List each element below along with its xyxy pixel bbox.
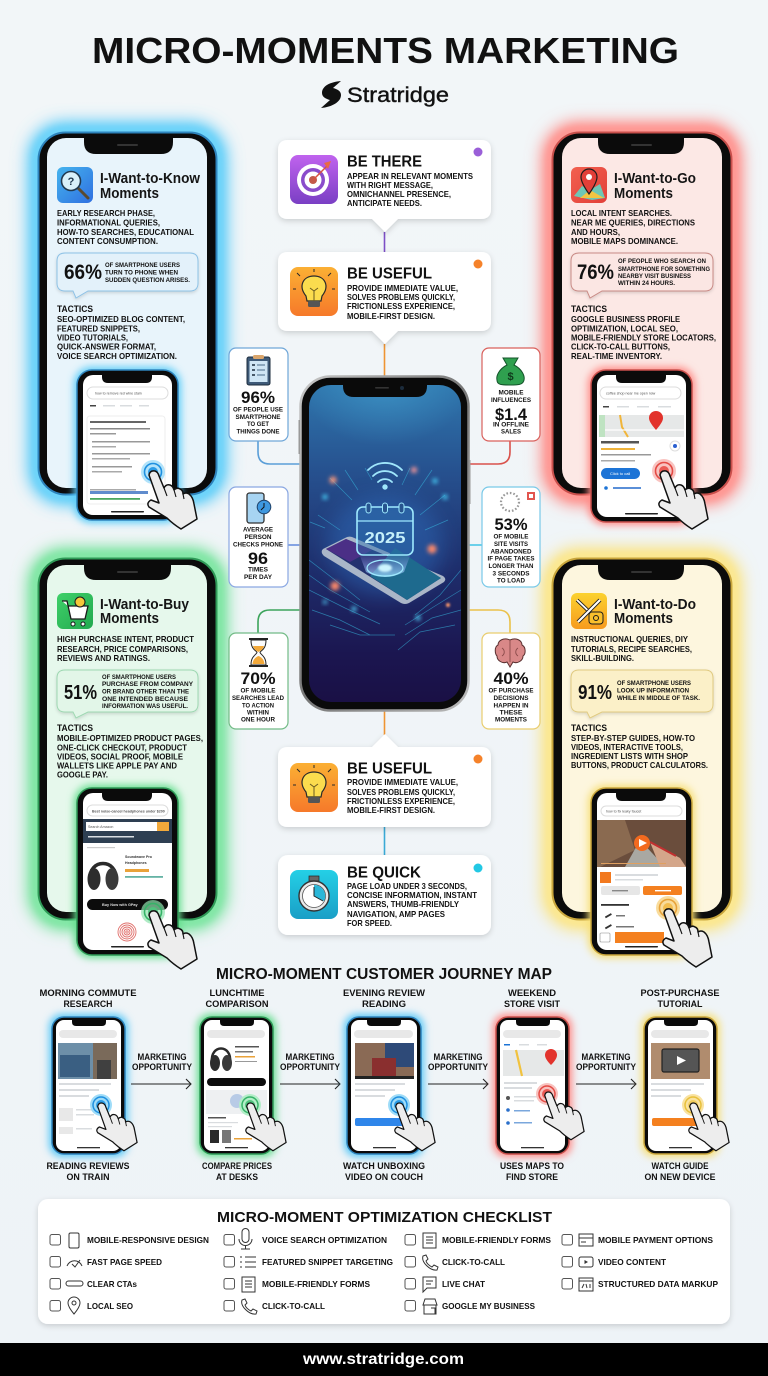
tactics: ONE-CLICK CHECKOUT, PRODUCT xyxy=(57,742,188,752)
callout: 66% stat xyxy=(57,253,198,298)
arrow: marketing opportunity 1 xyxy=(131,1052,192,1089)
checklist column 2: VOICE SEARCH OPTIMIZATION xyxy=(262,1236,387,1245)
stat box: 96% get things done: 96% xyxy=(241,388,275,407)
callout: 66% stat: TURN TO PHONE WHEN xyxy=(105,270,178,276)
journey heading: MICRO-MOMENT CUSTOMER JOURNEY MAP xyxy=(216,966,552,983)
tactics: GOOGLE BUSINESS PROFILE xyxy=(571,314,680,324)
description xyxy=(57,634,195,663)
label above: READING xyxy=(362,999,406,1009)
illustration: hologram beam xyxy=(360,556,410,577)
card: be there: ANTICIPATE NEEDS. xyxy=(347,198,422,208)
panel: I-Want-to-Do phone xyxy=(552,558,732,920)
glow: four big phones xyxy=(28,122,742,930)
tactics: FEATURED SNIPPETS, xyxy=(57,324,140,334)
tactics: VOICE SEARCH OPTIMIZATION. xyxy=(57,351,177,361)
checklist column 1: CLEAR CTAs xyxy=(87,1280,137,1289)
arrow: marketing opportunity 4: MARKETING xyxy=(582,1052,630,1062)
callout: 91% stat: OF SMARTPHONE USERS xyxy=(617,680,692,687)
checklist column 4: STRUCTURED DATA MARKUP xyxy=(598,1280,719,1289)
tactics: STEP-BY-STEP GUIDES, HOW-TO xyxy=(571,733,695,743)
label below xyxy=(202,1161,272,1182)
card: be there: BE THERE xyxy=(347,154,422,170)
heading xyxy=(100,171,201,202)
stat box: 96 times per day xyxy=(229,487,288,587)
tactics xyxy=(57,304,185,361)
icon: tapping hand xyxy=(689,1103,729,1151)
checklist column 3: LIVE CHAT xyxy=(442,1280,485,1289)
label above xyxy=(504,988,560,1009)
label above: MORNING COMMUTE xyxy=(40,988,136,998)
description xyxy=(57,208,194,246)
buttons: shop tools and buy now xyxy=(601,886,682,895)
label below: FIND STORE xyxy=(506,1172,558,1182)
arrow: marketing opportunity 4 xyxy=(576,1052,636,1089)
label above: STORE VISIT xyxy=(504,999,560,1009)
card: be quick: BE QUICK xyxy=(347,864,422,882)
callout: 76% stat: OF PEOPLE WHO SEARCH ON xyxy=(618,258,706,265)
arrow: marketing opportunity 4: OPPORTUNITY xyxy=(576,1062,636,1072)
stat box: 53% abandoned: ABANDONED xyxy=(490,548,532,556)
tactics xyxy=(571,304,716,361)
button xyxy=(355,1118,406,1126)
video thumbnail xyxy=(597,820,686,867)
tactics: TACTICS xyxy=(57,723,93,734)
label below: READING REVIEWS xyxy=(46,1161,130,1171)
card: be useful top: MOBILE-FIRST DESIGN. xyxy=(347,311,435,321)
label below: VIDEO ON COUCH xyxy=(345,1172,423,1182)
checklist column 1: LOCAL SEO xyxy=(87,1302,134,1311)
arrow: marketing opportunity 1: OPPORTUNITY xyxy=(132,1062,192,1072)
stat box: 96 times per day: CHECKS PHONE xyxy=(233,542,284,548)
checklist column 2 xyxy=(224,1229,393,1314)
panel: small phone search results xyxy=(74,367,197,529)
checklist heading: MICRO-MOMENT OPTIMIZATION CHECKLIST xyxy=(217,1209,552,1226)
panel: small phone product page: Search Amazon xyxy=(88,825,113,829)
callout: 51% stat: OF SMARTPHONE USERS xyxy=(102,674,177,681)
callout: 91% stat: 91% xyxy=(578,682,612,704)
stat box: 96% get things done: SMARTPHONE xyxy=(236,414,281,421)
label above: COMPARISON xyxy=(206,999,268,1009)
button: buy now xyxy=(87,899,168,910)
description: CONTENT CONSUMPTION. xyxy=(57,236,158,246)
icon: tapping hand xyxy=(148,911,197,969)
tactics xyxy=(57,723,203,780)
tactics: WALLETS LIKE APPLE PAY AND xyxy=(57,760,177,770)
card: be useful top: SOLVES PROBLEMS QUICKLY, xyxy=(347,292,455,302)
card: be there: OMNICHANNEL PRESENCE, xyxy=(347,189,451,199)
icon: money bag: $ xyxy=(507,371,514,383)
journey step 2: lunchtime comparison xyxy=(197,988,286,1182)
panel: small phone product page xyxy=(74,785,197,969)
card: be useful top: PROVIDE IMMEDIATE VALUE, xyxy=(347,283,458,293)
label below xyxy=(46,1161,130,1182)
label above: EVENING REVIEW xyxy=(343,988,426,998)
heading: I-Want-to-Buy xyxy=(100,597,189,613)
button: buy now: Buy Now with GPay xyxy=(102,903,139,907)
card: be quick: CONCISE INFORMATION, INSTANT xyxy=(347,890,478,900)
callout: 91% stat: WHILE IN MIDDLE OF TASK. xyxy=(617,695,700,702)
stat box: 96% get things done xyxy=(229,348,288,441)
description: HIGH PURCHASE INTENT, PRODUCT xyxy=(57,634,195,644)
card: be quick: FOR SPEED. xyxy=(347,918,392,928)
button xyxy=(652,1118,698,1126)
icon: brain xyxy=(495,639,525,667)
description xyxy=(571,208,695,246)
icon: tapping hand xyxy=(395,1103,435,1151)
stat box: 70% act within one hour: SEARCHES LEAD xyxy=(232,695,284,702)
icon: hourglass xyxy=(249,639,268,666)
stat box: 96 times per day: PER DAY xyxy=(244,574,273,581)
description: SKILL-BUILDING. xyxy=(571,653,634,663)
checklist column 1 xyxy=(50,1233,209,1314)
icon: fingerprint xyxy=(118,923,136,941)
illustration: haze behind artwork xyxy=(327,495,443,595)
tactics: OPTIMIZATION, LOCAL SEO, xyxy=(571,324,678,334)
checklist column 3: MOBILE-FRIENDLY FORMS xyxy=(442,1236,552,1245)
card: be there: APPEAR IN RELEVANT MOMENTS xyxy=(347,171,473,181)
connector lines xyxy=(258,232,510,855)
icon: light bulb xyxy=(290,763,338,812)
callout: 51% stat: OR BRAND OTHER THAN THE xyxy=(102,688,190,696)
callout: 51% stat: ONE INTENDED BECAUSE xyxy=(102,696,189,703)
label above xyxy=(206,988,268,1009)
heading xyxy=(614,597,696,627)
tactics: QUICK-ANSWER FORMAT, xyxy=(57,342,156,352)
card: be quick: PAGE LOAD UNDER 3 SECONDS, xyxy=(347,881,467,891)
logo: Stratridge xyxy=(321,81,449,108)
panel: optimization checklist xyxy=(38,1199,730,1324)
stat box: 40% decisions: THESE xyxy=(500,710,523,716)
heading xyxy=(100,597,189,627)
card: be useful bottom: SOLVES PROBLEMS QUICKLY, xyxy=(347,787,455,797)
stat box: 53% abandoned: TO LOAD xyxy=(497,578,525,584)
callout: 76% stat: NEARBY VISIT BUSINESS xyxy=(618,273,692,280)
checklist column 2: FEATURED SNIPPET TARGETING xyxy=(262,1258,393,1267)
description: NEAR ME QUERIES, DIRECTIONS xyxy=(571,218,695,228)
stat box: 40% decisions: OF PURCHASE xyxy=(488,688,534,694)
label below: USES MAPS TO xyxy=(500,1161,564,1171)
stat box: 40% decisions: HAPPEN IN xyxy=(494,702,529,710)
icon: map pin xyxy=(571,167,607,203)
callout: 76% stat: SMARTPHONE FOR SOMETHING xyxy=(618,266,710,273)
journey step 1: morning commute xyxy=(40,988,137,1182)
illustration: circuit lines xyxy=(309,468,461,650)
icon: phone with clock xyxy=(247,493,271,523)
description: TUTORIALS, RECIPE SEARCHES, xyxy=(571,644,692,654)
callout: 91% stat xyxy=(571,670,713,718)
icon: tapping hand xyxy=(97,1103,137,1151)
tactics: MOBILE-FRIENDLY STORE LOCATORS, xyxy=(571,332,716,342)
stat box: $1.4 mobile influences: $1.4 xyxy=(495,405,528,424)
callout: 76% stat: WITHIN 24 HOURS. xyxy=(618,280,675,287)
label below xyxy=(500,1161,564,1182)
arrow: marketing opportunity 3: OPPORTUNITY xyxy=(428,1062,488,1072)
journey step 5: post-purchase tutorial xyxy=(640,988,729,1182)
panel: I-Want-to-Buy phone xyxy=(38,558,216,920)
arrow: marketing opportunity 2: MARKETING xyxy=(286,1052,334,1062)
checklist column 2: MOBILE-FRIENDLY FORMS xyxy=(262,1280,371,1289)
label below: ON NEW DEVICE xyxy=(644,1172,716,1182)
stat box: 53% abandoned: 53% xyxy=(494,515,528,534)
card: be quick xyxy=(278,855,491,935)
checklist column 3: CLICK-TO-CALL xyxy=(442,1258,505,1267)
panel: small phone map results xyxy=(588,367,708,529)
checklist column 4: VIDEO CONTENT xyxy=(598,1258,666,1267)
tactics: TACTICS xyxy=(57,304,93,315)
button: click to call: Click to call xyxy=(610,471,630,476)
card: be useful bottom: BE USEFUL xyxy=(347,760,432,778)
stat box: 96 times per day: PERSON xyxy=(244,534,272,541)
tactics: VIDEOS, INTERACTIVE TOOLS, xyxy=(571,742,683,752)
journey step 3: evening review reading xyxy=(343,988,435,1182)
stat box: 96 times per day: 96 xyxy=(248,549,268,568)
stat box: 40% decisions: 40% xyxy=(494,669,528,688)
stat box: 40% decisions xyxy=(482,633,540,729)
arrow: marketing opportunity 2 xyxy=(280,1052,340,1089)
card: be useful bottom: MOBILE-FIRST DESIGN. xyxy=(347,805,435,815)
label above: TUTORIAL xyxy=(658,999,703,1009)
stat box: 96 times per day: TIMES xyxy=(248,566,269,574)
icon: tapping hand xyxy=(246,1103,286,1151)
card: be there: WITH RIGHT MESSAGE, xyxy=(347,180,433,190)
callout: 51% stat: INFORMATION WAS USEFUL. xyxy=(102,703,188,710)
label below xyxy=(644,1161,716,1182)
illustration: tilted smartphone xyxy=(322,537,445,604)
arrow: marketing opportunity 1: MARKETING xyxy=(138,1052,186,1062)
icon: tapping hand xyxy=(544,1092,584,1140)
label above: POST-PURCHASE xyxy=(640,988,720,998)
icon: 2025 calendar xyxy=(357,503,413,555)
label above: WEEKEND xyxy=(508,988,557,998)
label below: COMPARE PRICES xyxy=(202,1161,272,1171)
arrow: marketing opportunity 3: MARKETING xyxy=(434,1052,482,1062)
description: INFORMATIONAL QUERIES, xyxy=(57,218,160,228)
callout: 76% stat: 76% xyxy=(577,261,614,284)
panel: small phone product page: Soundwave Pro xyxy=(125,855,153,859)
icon: headphones xyxy=(88,864,118,890)
callout: 51% stat: 51% xyxy=(64,682,97,704)
heading: I-Want-to-Do xyxy=(614,597,696,613)
checklist column 2: CLICK-TO-CALL xyxy=(262,1302,325,1311)
heading xyxy=(614,171,696,202)
logo: Stratridge: Stratridge xyxy=(347,84,449,107)
icon: 2025 calendar: 2025 xyxy=(364,530,406,547)
stat box: 40% decisions: MOMENTS xyxy=(495,716,528,724)
heading: Moments xyxy=(614,186,673,202)
tactics: TACTICS xyxy=(571,723,607,734)
checklist column 3 xyxy=(405,1233,552,1314)
stat box: 70% act within one hour: OF MOBILE xyxy=(240,688,276,694)
stat box: 96% get things done: THINGS DONE xyxy=(236,428,280,436)
icon: light bulb xyxy=(290,267,338,316)
checklist column 1: MOBILE-RESPONSIVE DESIGN xyxy=(87,1236,209,1245)
footer bar xyxy=(0,1343,768,1376)
icon: target xyxy=(290,155,338,204)
description: LOCAL INTENT SEARCHES. xyxy=(571,208,672,218)
stat box: 53% abandoned: LONGER THAN xyxy=(488,563,534,570)
stat box: 70% act within one hour xyxy=(229,633,288,729)
footer bar: www.stratridge.com xyxy=(302,1351,464,1368)
tactics: INGREDIENT LISTS WITH SHOP xyxy=(571,751,688,761)
stat box: 53% abandoned: SITE VISITS xyxy=(494,541,529,548)
callout: 66% stat: SUDDEN QUESTION ARISES. xyxy=(105,277,190,284)
icon: tools xyxy=(571,593,607,629)
map xyxy=(599,411,684,437)
stat box: 53% abandoned xyxy=(482,487,540,587)
icon: tapping hand xyxy=(659,471,708,529)
callout: 51% stat: PURCHASE FROM COMPANY xyxy=(102,681,194,688)
stat box: 53% abandoned: IF PAGE TAKES xyxy=(488,556,535,562)
callout: 76% stat xyxy=(571,253,713,298)
arrow: marketing opportunity 3 xyxy=(428,1052,488,1089)
description: AND HOURS, xyxy=(571,227,620,237)
icon: loading spinner xyxy=(501,492,535,511)
stat box: 53% abandoned: 3 SECONDS xyxy=(492,570,530,578)
description: MOBILE MAPS DOMINANCE. xyxy=(571,236,678,246)
description xyxy=(571,634,692,663)
stat box: $1.4 mobile influences: INFLUENCES xyxy=(491,397,532,404)
label above xyxy=(40,988,136,1009)
panel: small phone map results: coffee shop near me open now xyxy=(606,392,656,396)
icon: wifi xyxy=(368,463,402,489)
description: REVIEWS AND RATINGS. xyxy=(57,653,150,663)
icon: clipboard xyxy=(247,355,270,385)
label below: AT DESKS xyxy=(216,1172,258,1182)
tactics: CLICK-TO-CALL BUTTONS, xyxy=(571,342,670,352)
journey step 4: weekend store visit xyxy=(493,988,584,1182)
icon: shopping cart xyxy=(57,593,93,629)
description: HOW-TO SEARCHES, EDUCATIONAL xyxy=(57,227,194,237)
stat box: 70% act within one hour: TO ACTION xyxy=(242,702,274,710)
panel: small phone product page: Best noise-cancel headphones under $200 xyxy=(92,810,165,814)
callout: 51% stat xyxy=(57,670,198,718)
heading: Moments xyxy=(100,611,159,627)
label above: LUNCHTIME xyxy=(210,988,264,998)
card: be useful top: FRICTIONLESS EXPERIENCE, xyxy=(347,301,455,311)
label below xyxy=(343,1161,425,1182)
label above xyxy=(343,988,426,1009)
label above xyxy=(640,988,720,1009)
tactics: TACTICS xyxy=(571,304,607,315)
description: INSTRUCTIONAL QUERIES, DIY xyxy=(571,634,688,644)
arrow: marketing opportunity 2: OPPORTUNITY xyxy=(280,1062,340,1072)
card: be quick: NAVIGATION, AMP PAGES xyxy=(347,909,445,919)
card: be useful bottom: PROVIDE IMMEDIATE VALUE, xyxy=(347,777,458,787)
icon: tapping hand xyxy=(148,471,197,529)
card: be useful bottom: FRICTIONLESS EXPERIENCE, xyxy=(347,796,455,806)
checklist column 3: GOOGLE MY BUSINESS xyxy=(442,1302,536,1311)
icon: stopwatch xyxy=(290,870,338,919)
button: click to call xyxy=(601,468,640,479)
stat box: 96% get things done: OF PEOPLE USE xyxy=(233,406,284,414)
stat box: $1.4 mobile influences xyxy=(482,348,540,441)
panel: I-Want-to-Know phone xyxy=(38,132,216,494)
heading: I-Want-to-Go xyxy=(614,171,696,187)
label below: WATCH GUIDE xyxy=(652,1161,708,1171)
stat box: 70% act within one hour: WITHIN xyxy=(247,710,269,716)
card: be there xyxy=(278,140,491,232)
callout: 66% stat: 66% xyxy=(64,261,102,284)
heading: I-Want-to-Know xyxy=(100,171,201,187)
icon: magnifier with question mark xyxy=(57,167,93,203)
heading: Moments xyxy=(614,611,673,627)
icon: tapping hand xyxy=(663,909,712,967)
illustration: glowing sparks xyxy=(322,467,450,620)
stat box: $1.4 mobile influences: IN OFFLINE xyxy=(493,422,530,428)
stat box: 40% decisions: DECISIONS xyxy=(494,695,529,702)
tactics xyxy=(571,723,708,770)
central phone xyxy=(298,376,470,710)
icon: magnifier with question mark: ? xyxy=(68,176,75,188)
checklist column 4 xyxy=(562,1234,719,1291)
heading: Moments xyxy=(100,186,159,202)
stat box: 53% abandoned: OF MOBILE xyxy=(494,534,529,540)
stat box: $1.4 mobile influences: SALES xyxy=(501,428,522,436)
panel: small phone product page: Headphones xyxy=(125,861,147,865)
label below: ON TRAIN xyxy=(66,1172,110,1182)
description: RESEARCH, PRICE COMPARISONS, xyxy=(57,644,188,654)
stat box: 70% act within one hour: 70% xyxy=(240,669,276,688)
stat box: 96% get things done: TO GET xyxy=(247,421,269,428)
stat box: $1.4 mobile influences: MOBILE xyxy=(498,390,524,396)
tactics: BUTTONS, PRODUCT CALCULATORS. xyxy=(571,760,708,770)
label below: WATCH UNBOXING xyxy=(343,1161,425,1171)
tactics: SEO-OPTIMIZED BLOG CONTENT, xyxy=(57,314,185,324)
panel: I-Want-to-Go phone xyxy=(552,132,732,494)
checklist column 1: FAST PAGE SPEED xyxy=(87,1258,162,1267)
panel: small phone how-to video: how to fix leaky faucet xyxy=(606,810,641,814)
card: be quick: ANSWERS, THUMB-FRIENDLY xyxy=(347,899,459,909)
tactics: VIDEO TUTORIALS, xyxy=(57,332,128,342)
tactics: REAL-TIME INVENTORY. xyxy=(571,351,662,361)
tactics: MOBILE-OPTIMIZED PRODUCT PAGES, xyxy=(57,733,203,743)
description: EARLY RESEARCH PHASE, xyxy=(57,208,155,218)
callout: 66% stat: OF SMARTPHONE USERS xyxy=(105,262,181,269)
title: MICRO-MOMENTS MARKETING xyxy=(92,30,679,71)
stat box: 70% act within one hour: ONE HOUR xyxy=(241,716,275,724)
card: be useful bottom xyxy=(278,734,491,827)
label above: RESEARCH xyxy=(64,999,112,1009)
checklist column 4: MOBILE PAYMENT OPTIONS xyxy=(598,1236,714,1245)
panel: small phone how-to video xyxy=(588,785,712,967)
panel: small phone search results: how to remove red wine stain xyxy=(95,392,142,396)
stat box: 96 times per day: AVERAGE xyxy=(243,526,274,534)
callout: 91% stat: LOOK UP INFORMATION xyxy=(617,688,689,694)
tactics: VIDEOS, SOCIAL PROOF, MOBILE xyxy=(57,752,183,762)
card: be useful top: BE USEFUL xyxy=(347,266,432,282)
card: be useful top xyxy=(278,252,491,344)
tactics: GOOGLE PAY. xyxy=(57,770,108,780)
